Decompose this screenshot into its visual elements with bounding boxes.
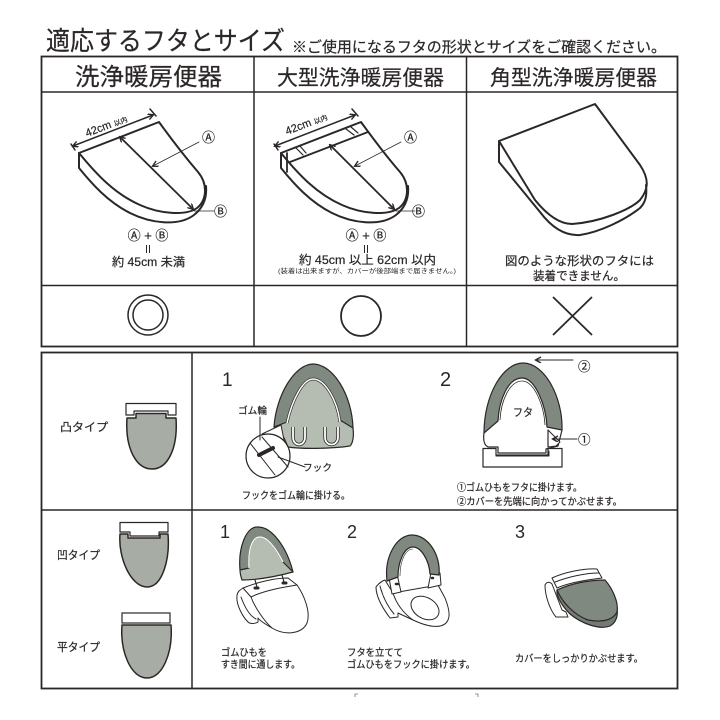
caption: フタを立てて: [347, 646, 403, 659]
symbol: double circle: [128, 295, 168, 335]
label: rubber ring: ゴム輪: [238, 405, 267, 417]
text: not compatible: 装着できません。: [533, 268, 625, 283]
formula: large: 約 45cm 以上 62cm 以内: [299, 252, 436, 267]
illustration: hooks on cover: [246, 364, 353, 478]
caption: ゴムひもをフックに掛けます。: [347, 658, 475, 671]
dimension label: 42cm 以内: [84, 113, 129, 140]
label: convex type: 凸タイプ: [60, 421, 109, 434]
heading: large: 大型洗浄暖房便器: [277, 67, 444, 90]
caption: [221, 646, 300, 671]
marker 2: ②: [578, 360, 591, 374]
marker B: Ⓑ: [214, 204, 227, 219]
heading: square: 角型洗浄暖房便器: [490, 67, 657, 90]
caption: ①ゴムひもをフタに掛けます。: [457, 481, 582, 494]
caption: カバーをしっかりかぶせます。: [515, 653, 643, 665]
subtitle note: ※ご使用になるフタの形状とサイズをご確認ください。: [292, 39, 666, 56]
label: flat type: 平タイプ: [57, 641, 100, 654]
symbol: circle: [341, 296, 381, 336]
step number: 1: [220, 522, 230, 542]
caption: [347, 646, 475, 671]
text: not compatible: [505, 254, 654, 283]
diagram: standard lid: [71, 109, 227, 222]
formula: standard: 約 45cm 未満: [112, 254, 185, 269]
heading: standard: 洗浄暖房便器: [75, 64, 222, 91]
icon: concave lid: [120, 522, 168, 587]
marker 1: ①: [578, 433, 591, 447]
formula: standard: Ⓐ + Ⓑ: [128, 228, 168, 243]
text: not compatible: 図のような形状のフタには: [505, 254, 654, 268]
caption: [457, 481, 622, 508]
diagram: square lid: [499, 104, 647, 235]
label: lid: フタ: [513, 406, 533, 419]
marker B: Ⓑ: [412, 204, 425, 219]
step number: 2: [347, 522, 357, 542]
formula: standard: [112, 228, 185, 269]
dimension label: 42cm 以内: [284, 111, 329, 138]
marker A: Ⓐ: [202, 130, 215, 145]
caption: ゴムひもを: [221, 646, 267, 659]
panel: installation table: [41, 352, 678, 689]
caption: ②カバーを先端に向かってかぶせます。: [457, 495, 622, 508]
caption: すき間に通します。: [221, 659, 300, 671]
step number: 3: [515, 522, 525, 542]
panel: compatibility table: [41, 56, 678, 346]
step number: 2: [440, 369, 451, 391]
caption: フックをゴム輪に掛ける。: [242, 489, 350, 502]
icon: flat lid: [122, 613, 171, 678]
illustration: raise lid and hook strap: [376, 535, 449, 626]
illustration: lid and cover: [483, 360, 591, 467]
icon: convex lid: [126, 404, 176, 469]
step 2 convex: [440, 360, 622, 508]
step number: 1: [222, 370, 233, 391]
marker A: Ⓐ: [404, 130, 417, 145]
illustration: cover fitted: [545, 569, 617, 627]
diagram: large lid: [274, 109, 425, 222]
crop marks: [355, 694, 478, 697]
illustration: strap through gap: [237, 527, 308, 633]
step 1 convex: [222, 364, 353, 502]
step 3 others: [515, 522, 643, 665]
label: concave type: 凹タイプ: [57, 549, 100, 562]
symbol: cross: [553, 297, 592, 335]
formula: large: Ⓐ + Ⓑ: [346, 228, 386, 243]
step 1 others: [220, 522, 308, 671]
step 2 others: [347, 522, 475, 671]
label: hook: フック: [303, 463, 332, 474]
formula: large: (装着は出来ますが、カバーが後部端まで届きません。): [278, 266, 456, 275]
title: 適応するフタとサイズ: [46, 26, 285, 56]
formula: large: [278, 228, 456, 275]
